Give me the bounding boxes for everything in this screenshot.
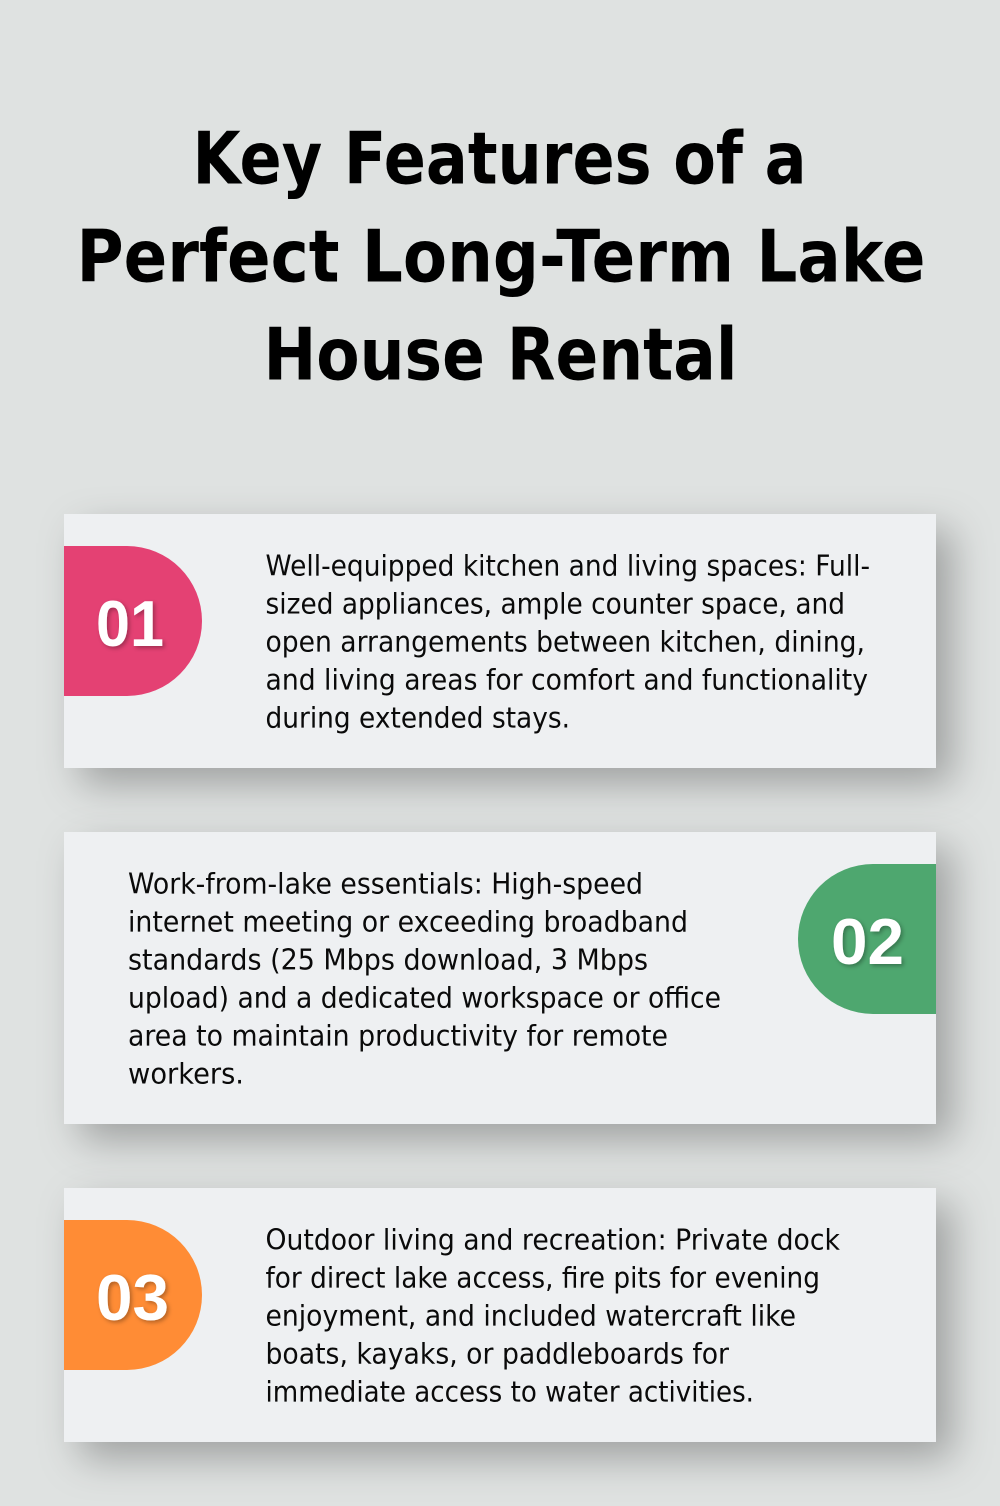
badge 03: 03 — [96, 1261, 169, 1334]
title — [76, 116, 926, 396]
badge 01: 01 — [96, 587, 164, 660]
panel: feature 02 — [64, 832, 936, 1124]
badge 03 — [64, 1220, 202, 1370]
text: kitchen and living spaces: Well-equipped kitchen and living spaces: Full- — [266, 550, 870, 582]
text: work-from-lake essentials: standards (25 Mbps download, 3 Mbps — [128, 944, 648, 976]
text: kitchen and living spaces: and living areas for comfort and functionality — [266, 664, 868, 696]
text: work-from-lake essentials: workers. — [128, 1058, 244, 1090]
title: Perfect Long-Term Lake — [76, 214, 926, 298]
badge 02: 02 — [831, 905, 904, 978]
text: kitchen and living spaces — [266, 550, 870, 734]
text: work-from-lake essentials: area to maintain productivity for remote — [128, 1020, 668, 1052]
text: outdoor living and recreation: enjoyment, and included watercraft like — [266, 1300, 796, 1332]
title: House Rental — [264, 312, 738, 396]
text: work-from-lake essentials: internet meeting or exceeding broadband — [128, 906, 688, 938]
text: work-from-lake essentials — [128, 868, 721, 1090]
text: kitchen and living spaces: sized appliances, ample counter space, and — [266, 588, 845, 620]
text: outdoor living and recreation: immediate access to water activities. — [266, 1376, 754, 1408]
badge 01 — [64, 546, 202, 696]
text: kitchen and living spaces: during extended stays. — [266, 702, 570, 734]
text: work-from-lake essentials: upload) and a dedicated workspace or office — [128, 982, 721, 1014]
text: outdoor living and recreation — [266, 1224, 840, 1408]
text: outdoor living and recreation: for direct lake access, fire pits for evening — [266, 1262, 820, 1294]
badge 02 — [798, 864, 936, 1014]
text: work-from-lake essentials: Work-from-lake essentials: High-speed — [128, 868, 643, 900]
text: outdoor living and recreation: Outdoor living and recreation: Private dock — [266, 1224, 840, 1256]
panel: feature 01 — [64, 514, 936, 768]
title: Key Features of a — [192, 116, 806, 200]
text: outdoor living and recreation: boats, kayaks, or paddleboards for — [266, 1338, 729, 1370]
panel: feature 03 — [64, 1188, 936, 1442]
text: kitchen and living spaces: open arrangements between kitchen, dining, — [266, 626, 865, 658]
